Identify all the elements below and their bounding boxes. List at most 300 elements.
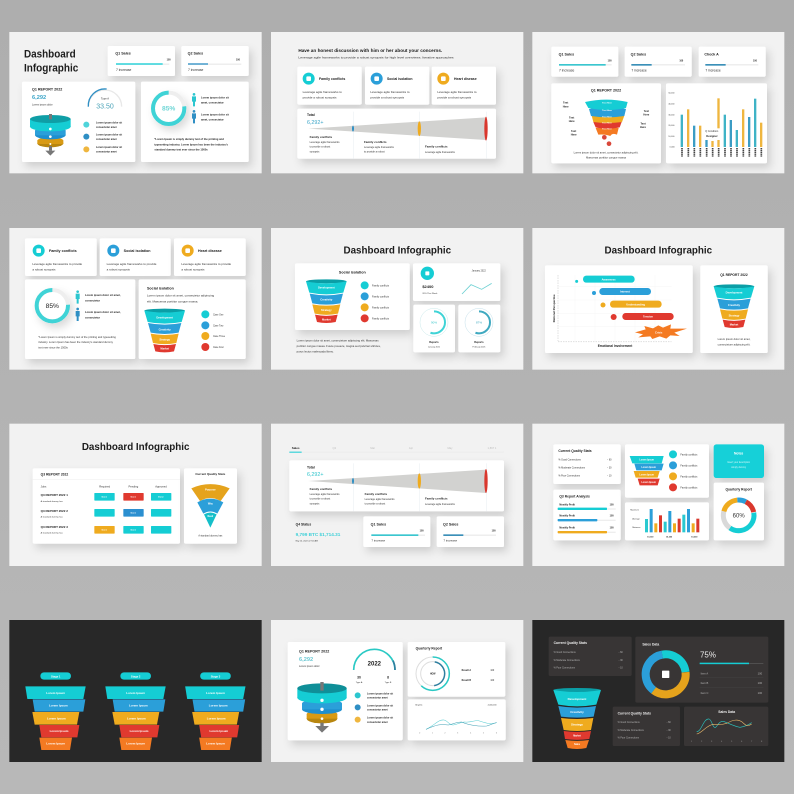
progress rows: 100	[610, 528, 614, 530]
status buttons	[94, 493, 171, 534]
rows: 100	[758, 671, 763, 675]
panel: quarterly donut: Quarterly Report	[725, 487, 753, 491]
card: family conflicts: Leverage agile frameworks to	[303, 90, 342, 94]
funnel: Creativity	[320, 298, 333, 302]
wedge captions: Leverage agile frameworks	[425, 503, 456, 506]
people and text: Lorem ipsum dolor sit amet,	[85, 310, 121, 314]
panel: line chart: 6	[741, 741, 742, 743]
panel: notes	[714, 444, 764, 478]
wedge captions: synopsis	[310, 503, 320, 506]
panel: funnel: Social isolation	[339, 270, 366, 274]
KPI card: profit: 7 increase	[188, 68, 204, 72]
funnel: Market	[730, 322, 738, 326]
funnel callouts: Here	[563, 104, 569, 108]
layered funnel: Text Here	[602, 109, 613, 112]
stage funnel 2: Stage 2	[131, 674, 141, 678]
panel: 85 percent donut	[141, 82, 249, 162]
panel: quality stats bottom: ⁃ 60	[666, 722, 671, 724]
panel: quality stats: ⁃ 30	[607, 467, 612, 470]
funnel: Development	[318, 286, 335, 290]
donut 85%: 85%	[162, 106, 175, 113]
title: Dashboard	[24, 49, 76, 61]
panel: funnel report	[22, 82, 135, 162]
tooltip: Designer	[706, 134, 718, 138]
panel: line chart: 5	[483, 732, 484, 734]
card: heart disease: a robust synopsis	[181, 268, 205, 272]
crypto stat: 9,799 BTC $1,714.31	[296, 532, 341, 537]
panel: revenue: $2400	[422, 284, 434, 289]
card: family conflicts: provide a robust synopsis	[303, 96, 337, 100]
donut	[717, 494, 760, 537]
panel: quality stats top: % Poor Connections	[554, 667, 576, 670]
panel: notes: simply dummy	[731, 467, 747, 469]
legend list: consectetur amet	[96, 138, 117, 141]
row labels: Q3 REPORT 2022 2	[41, 509, 68, 513]
panel: quality stats top: ⁃ 60	[618, 652, 623, 654]
paragraph: *Lorem Ipsum is simply dummy text of the printing and	[154, 137, 224, 141]
wedge chart	[308, 469, 488, 493]
row labels	[41, 493, 68, 535]
status buttons: Done	[158, 497, 164, 499]
wedge captions: Family conflicts	[310, 487, 333, 491]
panel: 85 percent	[25, 279, 135, 359]
y axis labels: 40,000	[668, 103, 675, 105]
panel: quality stats: Current Quality Stats	[558, 449, 592, 453]
panel: line chart: 4,000,000	[488, 705, 497, 707]
wedge captions: to provide a robust	[365, 503, 386, 506]
panel: inverted funnel: A standard dummy has	[198, 535, 223, 538]
total figure	[307, 113, 323, 126]
panel: quarterly rings: Quarterly Report	[416, 647, 443, 651]
tab bar	[289, 446, 504, 453]
wedge captions: Family conflicts	[364, 140, 387, 144]
KPI card 3	[699, 47, 766, 77]
column headings	[41, 484, 167, 488]
list: Family conflicts	[372, 295, 390, 298]
panel: quality stats: ⁃ 60	[607, 459, 612, 462]
paragraph: *Lorem Ipsum is simply dummy text of the printing and typesetting	[38, 335, 116, 339]
panel: report ring February: Reports	[474, 341, 484, 344]
rows: 100	[758, 691, 763, 695]
gauge	[354, 649, 395, 684]
row labels: A standard dummy has	[41, 532, 63, 535]
axes	[552, 275, 672, 348]
heading	[299, 649, 329, 668]
list: consectetur amet	[367, 709, 388, 712]
paragraph: typesetting industry. Lorem Ipsum has been the industry's	[154, 142, 228, 146]
funnel: Lorem Ipsum	[639, 474, 654, 476]
tab bar: Mar	[370, 446, 375, 450]
slide 4: cards, 85% donut and funnel	[9, 228, 262, 370]
tab bar: Q2	[333, 446, 337, 450]
title: Dashboard Infographic	[343, 245, 452, 256]
column headings: Pending	[128, 484, 139, 488]
starburst: Crisis	[655, 330, 663, 334]
x labels: 10,200	[666, 536, 673, 538]
panel: revenue: 20% This Week	[422, 293, 438, 295]
x labels: 10,300	[691, 536, 698, 538]
stage funnel 3: Lorem Ipsum	[209, 729, 229, 733]
ring legend: Result A	[462, 669, 471, 672]
panel: sales donut	[635, 637, 768, 703]
KPI card: sales: 7 increase	[116, 68, 132, 72]
people and text: consectetur	[85, 316, 100, 320]
KPI card 3: Check A	[704, 52, 719, 56]
stage funnel 1: Lorem Ipsum	[46, 691, 65, 695]
panel: progress bars	[553, 490, 621, 540]
gauge: Type B	[385, 682, 392, 684]
layered funnel: Text Here	[602, 122, 613, 125]
slide 5: funnel, revenue and report rings	[271, 228, 523, 370]
y axis labels: 0,000	[670, 147, 676, 149]
stage funnel 2: Lorem Ipsum	[126, 741, 145, 745]
lines	[426, 720, 497, 729]
wedge captions: synopsis	[310, 151, 320, 154]
rows: Item C	[701, 691, 709, 695]
crypto stat: May 10, 2022 at 9:00 AM	[296, 539, 318, 542]
wedge captions: Family conflicts	[425, 497, 448, 501]
funnel: Lorem Ipsum	[641, 467, 656, 469]
panel: sales donut: Sales Data	[642, 643, 659, 647]
panel: quality stats bottom	[613, 707, 680, 746]
y labels	[630, 510, 641, 529]
card: family conflicts: Family conflicts	[319, 77, 345, 81]
KPI card: profit	[181, 46, 249, 76]
KPI card 2	[437, 516, 504, 547]
KPI card: sales: 100	[167, 60, 171, 62]
heading: Leverage agile frameworks to provide a robust synopsis for high level overviews. Iterative approaches	[298, 56, 454, 60]
stage funnel 1: Lorem Ipsum	[50, 729, 69, 733]
panel: wedge timeline	[289, 460, 504, 511]
funnel: Development	[568, 697, 586, 701]
stage funnel 2	[105, 672, 166, 750]
slide 9: mixed dashboard	[532, 424, 784, 566]
report heading: Q1 REPORT 2022	[32, 88, 62, 92]
KPI card: profit: 100	[236, 60, 241, 62]
funnel: Lorem Ipsum	[641, 482, 656, 484]
stage pills: Interest	[620, 290, 630, 294]
heading: Q1 REPORT 2022	[299, 649, 329, 653]
card: social isolation: Leverage agile frameworks to provide	[107, 262, 157, 266]
panel: quality stats top: % Moderate Connections	[554, 659, 581, 662]
slide 11: gauge, funnel, rings and line chart	[271, 620, 523, 762]
panel heading: Social isolation	[147, 286, 174, 290]
wedge chart	[308, 117, 488, 141]
status buttons: Done	[131, 497, 137, 499]
wedge captions	[310, 135, 456, 154]
axes: Emotional Involvement	[598, 344, 633, 348]
panel: quality stats top	[549, 637, 632, 676]
tab bar: 1,867 1	[488, 446, 497, 450]
funnel callouts	[563, 101, 650, 137]
list: Lorem ipsum dolor sit	[367, 692, 393, 695]
3D funnel	[30, 114, 71, 156]
list: Family conflicts	[372, 284, 390, 287]
panel: line chart: 1	[691, 741, 692, 743]
progress rows: Monthly Profit	[559, 515, 575, 518]
card: family conflicts	[297, 67, 362, 105]
x labels: 10,100	[647, 536, 654, 538]
inverted funnel: Why	[208, 504, 213, 506]
KPI card: profit: Q2 Sales	[188, 52, 203, 56]
heading: Have an honest discussion with him or her about your concerns.	[298, 48, 442, 53]
list: Lorem ipsum dolor sit	[367, 705, 393, 708]
card: social isolation: Leverage agile frameworks to	[370, 90, 410, 94]
inverted funnel	[191, 484, 230, 528]
list: Family conflicts	[680, 453, 698, 456]
paragraph: text ever since the 1500s	[38, 345, 69, 349]
card: social isolation: Social isolation	[387, 77, 413, 81]
row labels: A standard dummy has	[41, 516, 63, 519]
stage dots	[575, 280, 617, 320]
panel: quality stats: % Moderate Connections	[558, 467, 586, 470]
funnel	[714, 284, 754, 328]
panel: line chart	[408, 699, 506, 740]
panel: report ring February	[458, 305, 500, 352]
legend list: Lorem ipsum dolor sit	[96, 146, 122, 149]
panel: line chart: Sales Data	[718, 710, 735, 714]
panel: line chart: 6	[496, 732, 497, 734]
stage funnel 2: Lorem Ipsum	[130, 729, 149, 733]
total figure: Total	[307, 113, 315, 117]
paragraph	[38, 335, 116, 349]
KPI card 2: 7 increase	[631, 69, 647, 73]
funnel: Creativity	[728, 303, 741, 307]
panel: notes: Insert your description	[727, 461, 751, 464]
panel: wedge timeline	[297, 109, 496, 159]
stage pills: Awareness	[602, 277, 616, 281]
stage pills: Understanding	[626, 302, 645, 306]
KPI card 2	[625, 47, 692, 77]
panel: quality stats bottom: ⁃ 10	[666, 738, 671, 740]
panel: quality stats top: ⁃ 30	[618, 660, 623, 662]
lines	[697, 719, 752, 734]
card: heart disease: Leverage agile frameworks to provide	[181, 262, 231, 266]
slide 1: dashboard with funnel and donut	[9, 32, 262, 173]
ring legend: 100	[490, 680, 495, 682]
total figure	[307, 465, 323, 478]
stage funnel 2: Lorem Ipsum	[129, 703, 148, 707]
panel: quality stats top: Current Quality Stats	[554, 641, 587, 645]
panel: quality stats: % Good Connections	[558, 459, 582, 462]
y axis labels: 20,000	[668, 125, 675, 127]
caption	[574, 150, 639, 159]
panel: inverted funnel: Current Quality Stats	[195, 472, 226, 476]
funnel callouts: Text	[569, 115, 574, 119]
wedge captions	[310, 487, 456, 506]
slide 3: KPI cards, funnel and bar chart	[532, 32, 784, 173]
legend list	[83, 122, 122, 153]
panel: stacked funnel	[625, 444, 709, 498]
legend list: consectetur amet	[96, 150, 117, 153]
KPI card 3: 100	[753, 60, 758, 62]
y labels: Maximum	[630, 510, 639, 512]
people icons with text: amet, consectetur	[201, 118, 224, 122]
card: heart disease	[432, 67, 496, 105]
layered funnel: Text Here	[602, 116, 613, 119]
funnel	[630, 456, 664, 485]
people icons with text	[192, 93, 229, 123]
panel: layered funnel	[551, 83, 661, 163]
wedge captions: to provide a robust	[310, 498, 331, 501]
row labels: A standard dummy has	[41, 500, 63, 503]
caption: consectetuer adipiscing elit.	[718, 342, 751, 346]
bars	[645, 509, 699, 532]
panel: line chart: 3	[711, 741, 712, 743]
paragraph: industry. Lorem Ipsum has been the industry's standard dummy	[38, 340, 114, 344]
panel: progress bars: Q3 Report Analysis	[559, 494, 590, 498]
gauge	[88, 89, 122, 110]
legend list: Lorem ipsum dolor sit	[96, 122, 122, 125]
column headings: Jobs	[41, 484, 47, 488]
wedge captions: Leverage agile frameworks	[310, 141, 340, 144]
panel: quality stats bottom: ⁃ 30	[666, 730, 671, 732]
list	[355, 692, 393, 724]
KPI card 1	[551, 47, 618, 77]
KPI card 1: Q1 Sales	[559, 52, 574, 56]
KPI card 2: Q2 Sales	[631, 52, 646, 56]
card: social isolation	[365, 67, 429, 105]
total figure: 6,292+	[307, 472, 323, 478]
funnel: Strategy	[321, 308, 332, 312]
panel: gauge and 3D funnel	[288, 642, 403, 740]
caption	[718, 337, 751, 346]
status buttons: Done	[131, 530, 137, 532]
row labels: Q3 REPORT 2022 1	[41, 493, 68, 497]
legend list: Lorem ipsum dolor sit	[96, 134, 122, 137]
panel: line chart: 2	[701, 741, 702, 743]
gauge: 30	[357, 675, 361, 679]
KPI card 1	[363, 516, 430, 547]
panel: quality stats bottom: Current Quality Stats	[618, 711, 651, 715]
y labels: Average	[632, 517, 641, 520]
card: heart disease	[174, 238, 246, 276]
y labels: Minimum	[632, 527, 641, 529]
panel: quality stats top: % Good Connections	[554, 651, 577, 654]
stage funnel 1: Lorem Ipsum	[47, 716, 66, 720]
x labels	[647, 536, 698, 538]
gauge: Type A	[101, 96, 109, 100]
panel: line chart: 3	[457, 732, 458, 734]
inverted funnel: Purpose	[205, 487, 216, 491]
list: Family conflicts	[680, 464, 698, 467]
tooltip	[705, 130, 719, 138]
funnel	[144, 309, 185, 352]
funnel: Strategy	[159, 337, 170, 341]
funnel: Strategy	[571, 722, 583, 726]
funnel callouts: Here	[640, 125, 646, 129]
wedge captions: Leverage agile frameworks	[425, 151, 456, 154]
report heading: 6,292	[32, 95, 46, 101]
panel: funnel	[295, 263, 410, 330]
progress rows: 100	[610, 505, 614, 507]
panel: quality stats bottom: % Moderate Connections	[618, 729, 645, 732]
case list: Case Four	[213, 346, 224, 349]
stage funnel 2: Lorem Ipsum	[127, 716, 146, 720]
progress rows	[558, 504, 616, 533]
KPI card 1: Q1 Sales	[371, 522, 386, 526]
progress rows: 100	[610, 516, 614, 518]
case list: Case One	[213, 314, 224, 316]
caption: Maecenas porttitor congue massa	[586, 155, 627, 159]
card: heart disease: Heart disease	[454, 77, 477, 81]
KPI card 1: 100	[420, 530, 424, 532]
funnel: Sales	[574, 744, 581, 746]
funnel callouts: Here	[571, 133, 577, 137]
card: family conflicts	[25, 238, 97, 276]
panel heading	[147, 286, 215, 303]
total figure: 6,292+	[307, 120, 323, 126]
panel heading: elit. Maecenas porttitor congue massa.	[147, 299, 198, 303]
funnel: Strategy	[729, 313, 740, 317]
rows: 100	[758, 681, 763, 685]
funnel: Market	[322, 317, 331, 321]
people and text: Lorem ipsum dolor sit amet,	[85, 293, 121, 297]
panel: revenue: January 2022	[472, 269, 486, 272]
tab bar: Sales	[292, 446, 300, 450]
stage funnel 2: Lorem Ipsum	[126, 691, 145, 695]
panel: line chart	[684, 707, 768, 746]
layered funnel: Text Here	[602, 128, 613, 131]
funnel	[306, 279, 347, 323]
tab bar: Apr	[409, 446, 413, 450]
stage funnel 1	[25, 672, 86, 750]
panel: line chart: 7	[751, 741, 752, 743]
slide 10: dark slide with three staged funnels	[9, 620, 262, 762]
KPI card 2: 7 increase	[443, 539, 457, 543]
wedge captions: Leverage agile frameworks	[310, 493, 340, 496]
panel: line chart: 8	[761, 741, 762, 743]
panel: inverted funnel	[184, 468, 237, 544]
row labels: Q3 REPORT 2022 3	[41, 525, 68, 529]
panel: bar chart	[666, 83, 767, 163]
stage funnel 3	[185, 672, 245, 750]
y axis labels: 50,000	[668, 92, 675, 94]
slide 7: approval table and inverted funnel	[9, 424, 262, 566]
funnel callouts: Here	[569, 119, 575, 123]
x axis labels	[682, 148, 761, 157]
KPI card 1: 7 increase	[371, 539, 385, 543]
KPI card 2: 100	[679, 60, 684, 62]
panel: notes: Notes	[734, 451, 743, 455]
wedge captions: Leverage agile frameworks	[364, 146, 395, 149]
progress rows: Monthly Profit	[559, 504, 575, 507]
ring legend: 100	[490, 670, 495, 672]
stage funnel 3: Stage 3	[211, 674, 221, 678]
stage funnel 1: Stage 1	[51, 674, 61, 678]
panel: quality stats top: ⁃ 10	[618, 668, 623, 670]
panel: quality stats bottom: % Good Connections	[618, 721, 641, 724]
percentage bar: 75%	[700, 651, 716, 660]
panel: quality stats: % Poor Connections	[558, 474, 581, 477]
wedge captions: to provide a robust	[310, 146, 331, 149]
column headings: Approved	[155, 484, 167, 488]
card: social isolation: Social isolation	[124, 249, 150, 253]
panel: funnel: Q1 REPORT 2022	[720, 273, 748, 277]
stage funnel 3: Lorem Ipsum	[206, 741, 225, 745]
donut	[638, 646, 694, 702]
ring legend	[462, 669, 495, 682]
panel: line chart: 2	[445, 732, 446, 734]
title: Dashboard Infographic	[604, 245, 713, 256]
ring legend: Result B	[462, 679, 471, 682]
KPI card 1: 100	[608, 60, 612, 62]
panel: quality stats: ⁃ 10	[607, 474, 612, 477]
funnel: Creativity	[570, 710, 584, 714]
caption: Lorem ipsum dolor sit amet,	[718, 337, 751, 341]
title: Dashboard Infographic	[82, 442, 190, 453]
report heading	[32, 88, 62, 106]
